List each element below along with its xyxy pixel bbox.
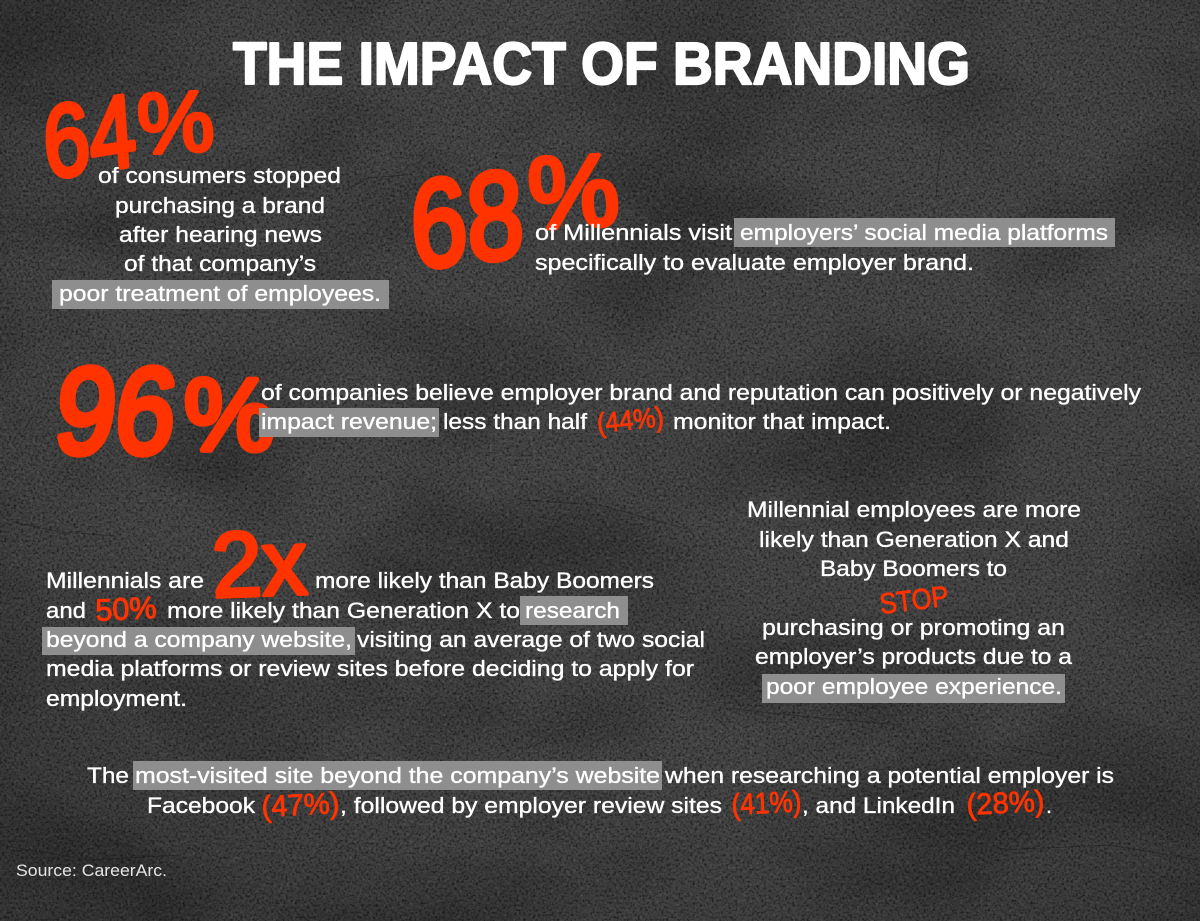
panel: Millennial employees STOP [747,497,1081,703]
big stat: 68%: 68 [407,144,527,296]
description: . [1046,793,1052,818]
title: THE IMPACT OF BRANDING [233,31,970,97]
description [87,763,1114,818]
description: of companies believe employer brand and reputation can positively or negatively [261,380,1142,405]
big stat: 96%: % [184,358,275,472]
description: media platforms or review sites before deciding to apply for [46,656,695,681]
description [59,163,381,306]
inline stat: STOP: STOP [878,581,950,621]
description: poor treatment of employees. [59,281,381,306]
description: Millennials are [46,568,204,593]
big stat: 96%: 96 [49,344,183,479]
source note: Source: CareerArc. [16,861,167,880]
panel: most-visited sites [87,761,1114,824]
description: specifically to evaluate employer brand. [535,250,974,275]
description: when researching a potential employer is [664,763,1114,788]
description: impact revenue; [261,409,437,434]
big stat: 96% [49,344,275,479]
description: employment. [46,686,187,711]
description: and [46,598,86,623]
description: most-visited site beyond the company’s website [135,763,660,788]
big stat: 2x: 2x [210,512,309,617]
inline stat: (44%): (44%) [595,401,665,439]
description: research [525,598,620,623]
description: bottom lines: purchasing or promoting an [762,615,1065,640]
highlight: poor employee experience [762,674,1065,703]
description: of that company’s [124,251,316,276]
highlight: beyond a company website [42,627,355,655]
big stat: 64%: % [135,73,216,173]
description: less than half [443,409,588,434]
highlight: poor treatment [52,280,389,309]
description [535,220,1108,275]
big stat: 68% [407,132,622,296]
description: Facebook [147,793,256,818]
description: top lines [747,497,1081,581]
description: , and LinkedIn [802,793,955,818]
description: , followed by employer review sites [340,793,722,818]
description: top lines: likely than Generation X and [759,527,1069,552]
description: employers’ social media platforms [740,220,1108,245]
panel: 96% of companies [49,344,1142,479]
description: bottom lines: poor employee experience. [766,674,1062,699]
big stat: 68%: % [525,132,622,251]
description: more likely than Generation X to [167,598,520,623]
description: after hearing news [119,222,322,247]
highlight: most-visited site [133,761,662,790]
description: of Millennials visit [535,220,733,245]
description [261,380,1142,434]
highlight: employers' social media [734,218,1115,247]
description: top lines: Millennial employees are more [747,497,1081,522]
description: purchasing a brand [115,193,325,218]
description: bottom lines: employer’s products due to a [755,644,1073,669]
big stat: 64%: 64 [40,72,139,201]
description: The [87,763,129,788]
panel: Millennials 2x [42,512,705,711]
inline stat: (47%): (47%) [261,787,340,824]
description: top lines: Baby Boomers to [820,556,1007,581]
inline stat: (28%): (28%) [966,785,1045,822]
highlight: impact revenue [259,408,439,437]
inline stat: 50%: 50% [95,590,157,628]
description: more likely than Baby Boomers [315,568,654,593]
description [46,568,705,711]
inline stat: (41%): (41%) [731,785,802,822]
panel: 64% of consumers [40,72,389,309]
description: visiting an average of two social [357,627,705,652]
description: bottom lines [755,615,1073,699]
highlight: research [520,596,628,625]
description: monitor that impact. [673,409,891,434]
description: beyond a company website, [46,627,352,652]
big stat: 64% [40,72,216,201]
description: of consumers stopped [98,163,341,188]
panel: 68% of Millennials [407,132,1115,296]
